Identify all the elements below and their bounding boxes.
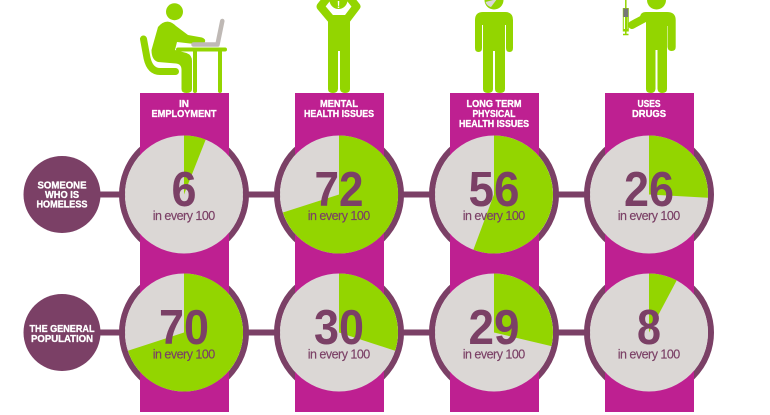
pie: homeless mental health 72: 72	[314, 163, 364, 217]
pie: general population uses drugs 8: in every 100	[618, 347, 680, 361]
pie: homeless physical health 56: in every 100	[463, 209, 525, 223]
pie: general population mental health 30	[280, 274, 398, 392]
pie: general population in employment 70	[125, 274, 243, 392]
icon: standing person with bandaged head	[475, 0, 513, 93]
row label: the general population	[24, 294, 100, 371]
pie: homeless uses drugs 26: in every 100	[618, 209, 680, 223]
icon: person with hands on head: !	[337, 0, 340, 11]
column: in employment: IN	[179, 98, 189, 110]
row label: someone who is homeless: SOMEONE	[38, 180, 86, 192]
column: long term physical health issues	[450, 93, 539, 412]
column: long term physical health issues: LONG TERM	[466, 98, 522, 110]
column: in employment	[140, 93, 229, 412]
icon: person with hands on head	[320, 0, 356, 93]
column: uses drugs: USES	[638, 98, 660, 110]
column: in employment: EMPLOYMENT	[152, 108, 217, 120]
pie: homeless in employment 6	[125, 135, 243, 254]
column: mental health issues: MENTAL	[320, 98, 359, 110]
connector lines and circle rings	[90, 132, 711, 394]
column: mental health issues	[295, 93, 384, 412]
row label: someone who is homeless: WHO IS	[45, 189, 79, 201]
pie: general population mental health 30: in every 100	[308, 347, 370, 361]
icon: person working at laptop	[144, 3, 225, 93]
pie: general population in employment 70: 70	[159, 301, 209, 355]
column: long term physical health issues: PHYSICAL	[472, 108, 516, 120]
pie: homeless mental health 72	[280, 135, 398, 254]
pie: homeless mental health 72: in every 100	[308, 209, 370, 223]
pie: homeless uses drugs 26	[590, 136, 708, 254]
column: uses drugs: DRUGS	[632, 108, 666, 120]
row label: the general population: POPULATION	[31, 333, 93, 345]
pie: homeless physical health 56: 56	[468, 163, 520, 217]
row label: someone who is homeless	[24, 156, 100, 233]
pie: general population in employment 70: in every 100	[153, 347, 215, 361]
column: long term physical health issues: HEALTH ISSUES	[459, 118, 529, 130]
pie: homeless in employment 6: in every 100	[153, 209, 215, 223]
pie: general population physical health 29: in every 100	[463, 347, 525, 361]
column: uses drugs	[605, 93, 694, 412]
pie: homeless in employment 6: 6	[172, 163, 196, 217]
row label: the general population: THE GENERAL	[30, 323, 95, 335]
pie: homeless uses drugs 26: 26	[624, 163, 674, 217]
pie: general population mental health 30: 30	[314, 301, 364, 355]
pie: general population uses drugs 8: 8	[637, 301, 661, 355]
pie: general population physical health 29	[435, 274, 553, 392]
pie: general population physical health 29: 29	[468, 301, 520, 355]
pie: general population uses drugs 8	[590, 274, 708, 392]
icon: standing person holding syringe	[623, 0, 676, 93]
pie: homeless physical health 56	[435, 136, 553, 254]
row label: someone who is homeless: HOMELESS	[36, 198, 88, 210]
column: mental health issues: HEALTH ISSUES	[304, 108, 374, 120]
